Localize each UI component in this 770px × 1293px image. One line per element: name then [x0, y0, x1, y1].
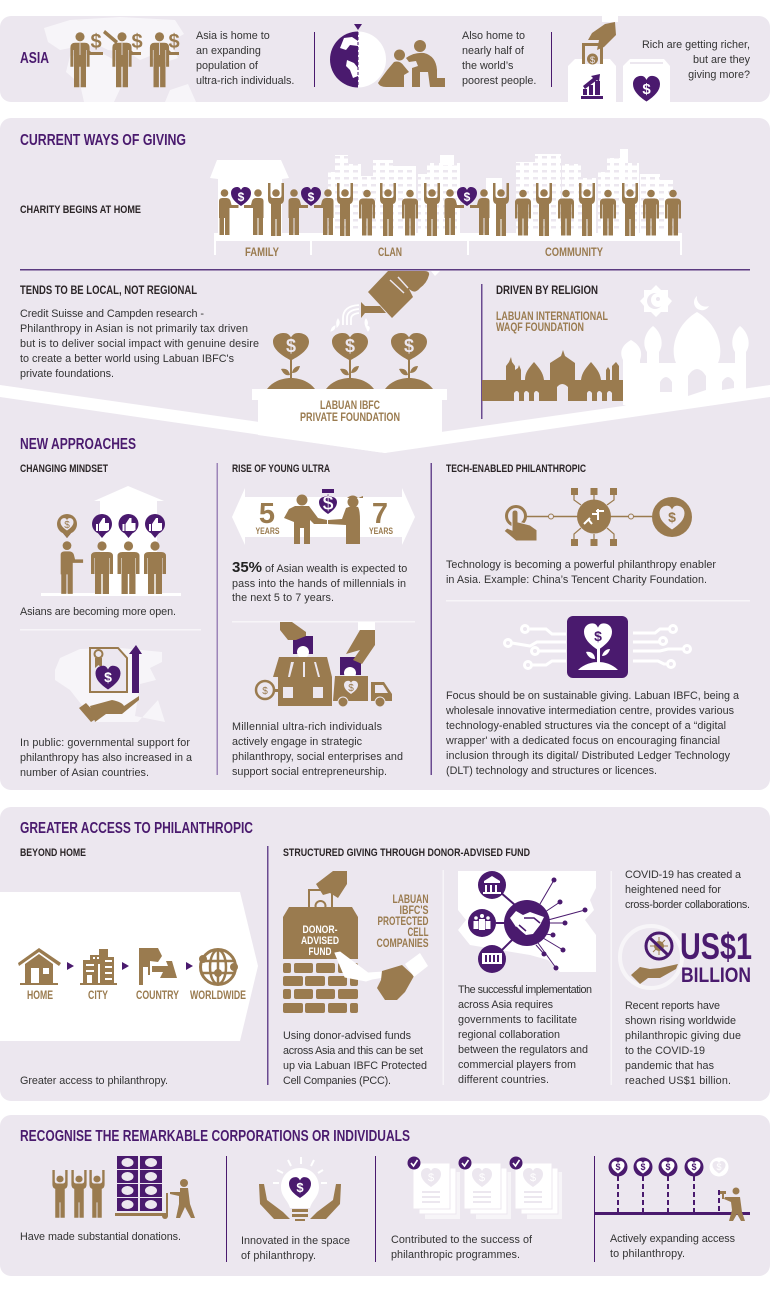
- text: innovated: [241, 1235, 350, 1262]
- text: innovated: of philanthropy.: [241, 1250, 316, 1262]
- text: millennial: Millennial ultra-rich individuals: [232, 721, 383, 733]
- icon: checked documents: $: [479, 1172, 485, 1184]
- text: recent reports: shown rising worldwide: [625, 1015, 736, 1027]
- text: ultra-rich: [196, 30, 294, 87]
- panel: asia: [0, 16, 770, 102]
- heading: charity begins at home: CHARITY BEGINS AT HOME: [20, 204, 141, 216]
- text: governmental support: number of Asian countries.: [20, 767, 149, 779]
- icon: bulb and hands: $: [296, 1180, 304, 1195]
- plants with heart dollars: $: [404, 336, 414, 356]
- heading: new approaches: NEW APPROACHES: [20, 436, 136, 453]
- icon: us$1 billion: BILLION: [681, 964, 751, 987]
- illustration: white mosque: [621, 285, 749, 408]
- text: 35 percent: the next 5 to 7 years.: [232, 592, 334, 604]
- text: using donor-advised: across Asia and this can be set: [283, 1045, 423, 1057]
- icon: blockchain flow: $: [668, 509, 676, 525]
- text: credit suisse: [20, 308, 259, 380]
- heading: driven by religion: DRIVEN BY RELIGION: [496, 283, 598, 297]
- text: 35 percent: pass into the hands of millennials in: [232, 578, 406, 590]
- panel: recognise: [0, 1115, 770, 1276]
- text: poorest: nearly half of: [462, 45, 525, 57]
- panel: current ways and new approaches: [0, 118, 770, 790]
- text: ultra-rich: Asia is home to: [196, 30, 270, 42]
- icon: donation boxes: [568, 16, 670, 102]
- text: 35 percent: 35% of Asian wealth is expected to: [232, 559, 407, 576]
- text: using donor-advised: [283, 1030, 427, 1087]
- label: protected cell companies: [376, 892, 429, 950]
- icon: sustainable giving chip: [504, 616, 690, 678]
- heading: local: TENDS TO BE LOCAL, NOT REGIONAL: [20, 283, 197, 297]
- labels: home city country worldwide: WORLDWIDE: [190, 988, 246, 1002]
- label: waqf foundation: WAQF FOUNDATION: [496, 320, 584, 334]
- text: using donor-advised: Cell Companies (PCC).: [283, 1075, 391, 1087]
- text: credit suisse: Credit Suisse and Campden research -: [20, 308, 204, 320]
- text: millennial: actively engage in strategic: [232, 736, 363, 748]
- icon: rich men with dollars: $: [131, 31, 143, 53]
- icon: shop and truck: $: [348, 683, 354, 694]
- icon: us$1 billion: US$1: [680, 926, 752, 967]
- label: protected cell companies: CELL: [408, 925, 428, 939]
- heading: recognise: RECOGNISE THE REMARKABLE CORPORATIONS OR INDIVIDUALS: [20, 1128, 410, 1145]
- labels: family clan community: COMMUNITY: [545, 245, 603, 259]
- text: successful implementation: regional collaboration: [458, 1029, 560, 1041]
- icon: house and people approving: $: [64, 520, 70, 531]
- heading: tech-enabled: TECH-ENABLED PHILANTHROPIC: [446, 463, 586, 475]
- icon: sustainable giving chip: $: [594, 628, 602, 644]
- icon: donation boxes: $: [590, 55, 595, 65]
- text: donations: Have made substantial donations.: [20, 1231, 181, 1243]
- text: ultra-rich: population of: [196, 60, 259, 72]
- icon: milestones and worker: $: [716, 1162, 722, 1172]
- text: covid collaborations: [625, 869, 750, 911]
- text: contributed: Contributed to the success of: [391, 1234, 533, 1246]
- white arrow banner: [0, 892, 258, 1041]
- icon: home: [18, 948, 61, 985]
- text: successful implementation: across Asia requires: [458, 999, 554, 1011]
- labels: family clan community: [245, 245, 603, 259]
- icon: helping figures: [378, 40, 445, 87]
- icon: map with document and hand: $: [104, 669, 112, 685]
- text: contributed: [391, 1234, 533, 1261]
- text: sustainable giving: (DLT) technology and structures or licences.: [446, 765, 657, 777]
- icon: hearts with dollars: $: [464, 190, 471, 204]
- labels: family clan community: CLAN: [378, 245, 402, 259]
- icon: handover 5 to 7 years: [232, 488, 415, 545]
- text: governmental support: [20, 737, 192, 779]
- text: technology enabler: Technology is becoming a powerful philanthropy enabler: [446, 559, 716, 571]
- text: expanding access: Actively expanding access: [610, 1233, 736, 1245]
- text: poorest: [462, 30, 536, 87]
- heading: changing mindset: CHANGING MINDSET: [20, 463, 108, 475]
- icon: donation boxes: $: [642, 81, 651, 98]
- text: credit suisse: private foundations.: [20, 368, 114, 380]
- icon: worldwide globe: [199, 950, 238, 984]
- illustration: city and house: [210, 149, 682, 255]
- text: rich getting richer: but are they: [693, 54, 751, 66]
- text: poorest: Also home to: [462, 30, 525, 42]
- icon: us$1 billion: [620, 926, 752, 988]
- icon: rich men with dollars: [70, 30, 180, 87]
- labels: family clan community: FAMILY: [245, 245, 279, 259]
- text: recent reports: [625, 1000, 741, 1087]
- heading: structured giving: STRUCTURED GIVING THROUGH DONOR-ADVISED FUND: [283, 847, 530, 859]
- panel: greater access: [0, 807, 770, 1101]
- text: covid collaborations: cross-border collaborations.: [625, 899, 750, 911]
- icon: blockchain flow: [504, 488, 692, 546]
- text: sustainable giving: wholesale innovative intermediation centre, provides various: [445, 705, 735, 717]
- text: expanding access: to philanthropy.: [610, 1248, 685, 1260]
- text: successful implementation: different countries.: [458, 1074, 549, 1086]
- text: covid collaborations: COVID-19 has created a: [625, 869, 741, 881]
- text: sustainable giving: wrapper' with a dedicated focus on encouraging financial: [445, 735, 720, 747]
- text: rich getting richer: [642, 39, 751, 81]
- label: waqf foundation: [496, 309, 608, 334]
- icon: rich men with dollars: $: [90, 31, 102, 53]
- icon: handover 5 to 7 years: $: [322, 493, 334, 515]
- text: successful implementation: between the regulators and: [458, 1044, 588, 1056]
- icon: handover 5 to 7 years: YEARS: [369, 526, 393, 536]
- text: recent reports: philanthropic giving due: [625, 1030, 741, 1042]
- heading: rise of young ultra: RISE OF YOUNG ULTRA: [232, 463, 330, 475]
- icon: trowel and hand: [335, 952, 428, 1000]
- text: contributed: philanthropic programmes.: [391, 1249, 520, 1261]
- text: technology enabler: in Asia. Example: China’s Tencent Charity Foundation.: [446, 574, 707, 586]
- icon: shop and truck: $: [262, 686, 268, 697]
- text: more open: Asians are becoming more open.: [20, 606, 176, 618]
- heading: beyond home: BEYOND HOME: [20, 847, 86, 859]
- text: 35 percent: [232, 559, 407, 604]
- water drops: [331, 305, 369, 331]
- icon: handover 5 to 7 years: YEARS: [256, 526, 280, 536]
- icon: rich men with dollars: $: [168, 31, 180, 53]
- icon: country flags: [139, 948, 177, 985]
- illustration: people giving: [219, 183, 681, 236]
- text: sustainable giving: inclusion through its digital/ Distributed Ledger Technology: [446, 750, 731, 762]
- labels: home city country worldwide: COUNTRY: [136, 988, 179, 1002]
- text: expanding access: [610, 1233, 736, 1260]
- label: protected cell companies: IBFC'S: [400, 903, 428, 917]
- text: governmental support: philanthropy has also increased in a: [20, 752, 192, 764]
- text: recent reports: pandemic that has: [625, 1060, 715, 1072]
- text: sustainable giving: technology-enabled structures via the concept of a “digital: [446, 720, 726, 732]
- icon: milestones and worker: $: [615, 1162, 621, 1172]
- icon: checked documents: [408, 1156, 562, 1219]
- text: using donor-advised: Using donor-advised funds: [283, 1030, 412, 1042]
- plants with heart dollars: [267, 333, 433, 389]
- icon: shop and truck: [256, 622, 392, 707]
- text: governmental support: In public: governmental support for: [20, 737, 190, 749]
- icon: checked documents: $: [530, 1172, 536, 1184]
- text: successful implementation: governments to facilitate: [458, 1014, 577, 1026]
- text: credit suisse: Philanthropy in Asian is not primarily tax driven: [20, 323, 248, 335]
- world map background: [44, 17, 196, 102]
- icon: checked documents: $: [428, 1172, 434, 1184]
- label: protected cell companies: LABUAN: [392, 892, 428, 906]
- text: ultra-rich: ultra-rich individuals.: [196, 75, 294, 87]
- icon: map with document and hand: [55, 645, 165, 722]
- label: private foundation: LABUAN IBFC: [320, 398, 380, 412]
- text: poorest: poorest people.: [462, 75, 536, 87]
- text: sustainable giving: Focus should be on sustainable giving. Labuan IBFC, being a: [446, 690, 739, 702]
- plants with heart dollars: $: [286, 336, 296, 356]
- icon: house and people approving: [41, 486, 181, 596]
- plants with heart dollars: $: [345, 336, 355, 356]
- text: ultra-rich: an expanding: [196, 45, 261, 57]
- text: covid collaborations: heightened need for: [625, 884, 721, 896]
- icon: watering can: [361, 271, 440, 318]
- icon: hearts with dollars: $: [308, 190, 315, 204]
- text: rich getting richer: Rich are getting richer,: [642, 39, 750, 51]
- label: protected cell companies: COMPANIES: [376, 936, 428, 950]
- text: technology enabler: [446, 559, 716, 586]
- labels: home city country worldwide: HOME: [27, 988, 53, 1002]
- icon: donations pallet: [52, 1156, 195, 1219]
- text: rich getting richer: giving more?: [688, 69, 750, 81]
- heading: current ways of giving: CURRENT WAYS OF GIVING: [20, 132, 186, 149]
- text: successful implementation: The successful implementation: [458, 984, 592, 996]
- pot: [252, 389, 447, 453]
- heading: greater access: GREATER ACCESS TO PHILANTHROPIC: [20, 820, 253, 837]
- icon: half globe: [330, 24, 386, 88]
- label: private foundation: PRIVATE FOUNDATION: [300, 410, 400, 424]
- text: recent reports: to the COVID-19: [625, 1045, 705, 1057]
- text: millennial: support social entrepreneurship.: [232, 766, 387, 778]
- icon: handover 5 to 7 years: 5: [259, 498, 275, 530]
- icon: regional collaboration network: [458, 871, 596, 973]
- text: successful implementation: commercial players from: [458, 1059, 576, 1071]
- text: using donor-advised: up via Labuan IBFC Protected: [283, 1060, 427, 1072]
- text: credit suisse: to create a better world using Labuan IBFC's: [20, 353, 235, 365]
- icon: hearts with dollars: $: [238, 190, 245, 204]
- text: greater access: Greater access to philanthropy.: [20, 1075, 168, 1087]
- icon: bulb and hands: [259, 1157, 341, 1221]
- icon: donor-advised fund box: [283, 871, 358, 1013]
- icon: hearts with dollars: [231, 187, 477, 206]
- icon: donor-advised fund box: ADVISED: [301, 935, 339, 947]
- text: millennial: [232, 721, 403, 778]
- label: protected cell companies: PROTECTED: [378, 914, 429, 928]
- chevron band: [0, 385, 770, 453]
- icon: city: [80, 949, 117, 985]
- icon: milestones and worker: [594, 1158, 750, 1221]
- label: waqf foundation: LABUAN INTERNATIONAL: [496, 309, 608, 323]
- icon: milestones and worker: $: [640, 1162, 646, 1172]
- text: successful implementation: [458, 984, 592, 1086]
- text: sustainable giving: [445, 690, 739, 777]
- text: poorest: the world’s: [462, 60, 514, 72]
- text: millennial: philanthropy, social enterprises and: [232, 751, 403, 763]
- arrows between steps: [67, 962, 193, 970]
- labels: home city country worldwide: CITY: [88, 988, 108, 1002]
- text: credit suisse: but is to deliver social impact with genuine desire: [20, 338, 259, 350]
- text: recent reports: Recent reports have: [625, 1000, 720, 1012]
- heading: asia: ASIA: [20, 50, 49, 67]
- icon: handover 5 to 7 years: 7: [372, 498, 388, 530]
- labels: home city country worldwide: [27, 988, 246, 1002]
- icon: milestones and worker: $: [691, 1162, 697, 1172]
- icon: donor-advised fund box: DONOR-: [302, 924, 338, 936]
- text: recent reports: reached US$1 billion.: [625, 1075, 731, 1087]
- label: private foundation: [300, 398, 400, 424]
- icon: milestones and worker: $: [665, 1162, 671, 1172]
- icon: donor-advised fund box: FUND: [308, 946, 332, 958]
- illustration: gold mosque skyline: [482, 350, 647, 401]
- text: innovated: Innovated in the space: [241, 1235, 350, 1247]
